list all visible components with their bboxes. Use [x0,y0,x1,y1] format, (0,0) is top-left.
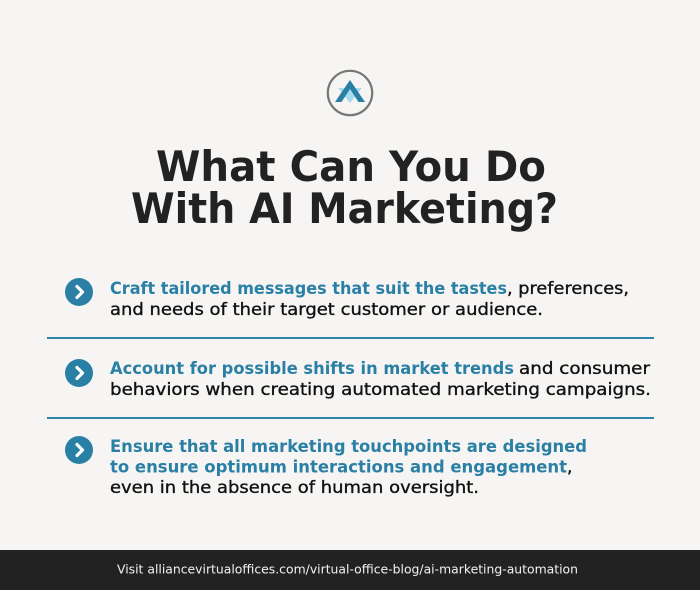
list item 1 [65,278,629,320]
item 1 text: Craft tailored messages that suit the tastes [110,279,507,299]
footer bar [0,550,700,590]
title: What Can You Do [156,142,546,191]
title [131,142,558,233]
icon: chevron bullet 3 [65,436,93,464]
item 3 text: , [567,458,572,478]
footer bar: Visit alliancevirtualoffices.com/virtual-office-blog/ai-marketing-automation [117,562,578,576]
icon: chevron bullet 1 [65,278,93,306]
list item 3 [65,436,587,498]
item 2 text: and consumer [519,359,650,379]
item 2 text: behaviors when creating automated marketing campaigns. [110,380,651,400]
item 1 text: and needs of their target customer or audience. [110,300,543,320]
item 3 text: to ensure optimum interactions and engagement [110,458,567,478]
icon: brand logo [328,71,372,115]
item 3 text: Ensure that all marketing touchpoints are designed [110,437,587,457]
icon: chevron bullet 2 [65,359,93,387]
item 3 text [110,437,587,498]
item 3 text: even in the absence of human oversight. [110,478,479,498]
item 1 text: , preferences, [507,279,629,299]
item 2 text: Account for possible shifts in market trends [110,359,514,379]
item 2 text [110,359,651,400]
item 1 text [110,279,629,320]
list item 2 [65,359,651,400]
title: With AI Marketing? [131,184,558,233]
